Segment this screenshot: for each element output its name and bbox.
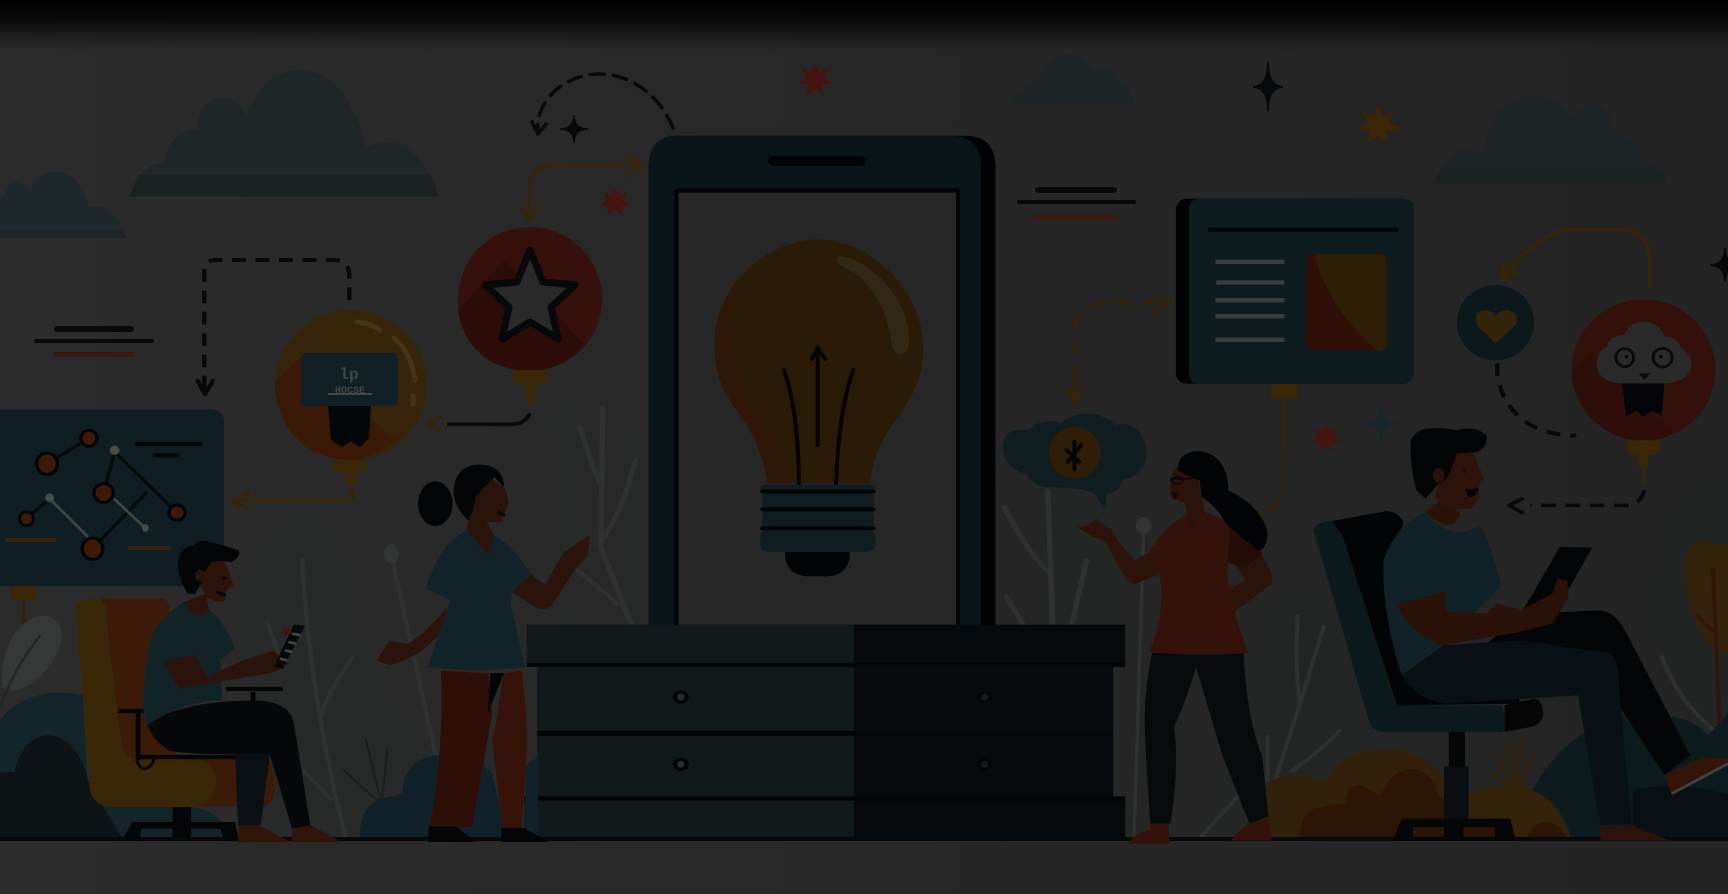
back hair and sleeve — [1196, 519, 1272, 617]
rear leg — [1483, 610, 1728, 795]
office chair — [1314, 511, 1543, 840]
medal bulb left: lp — [339, 366, 359, 384]
figure: standing woman left — [377, 464, 549, 842]
shirt — [1383, 512, 1501, 675]
cloud: large left — [130, 70, 439, 197]
sparkle stars and bursts — [560, 62, 1728, 451]
arm — [1077, 519, 1164, 584]
chair — [76, 599, 283, 840]
pants — [428, 670, 549, 842]
head — [1411, 428, 1487, 525]
top shadow — [0, 0, 1728, 50]
gold curved arrow to heart — [1501, 229, 1650, 287]
panel: screen card — [1176, 198, 1414, 447]
figure: seated man right — [1314, 428, 1728, 840]
woman left raised forearm — [512, 535, 590, 609]
torso and arm — [143, 541, 288, 725]
medal star — [458, 227, 602, 406]
text lines right — [1017, 187, 1136, 220]
figure: seated man left — [76, 541, 342, 842]
gold arrow to chart — [234, 490, 353, 509]
left mounds and leaf — [0, 615, 228, 837]
panel: network chart — [0, 409, 224, 624]
faint background plants left — [235, 510, 437, 837]
text lines left — [34, 326, 154, 357]
bushes behind left woman — [360, 755, 538, 837]
speech cloud — [1003, 414, 1147, 510]
cloud: small centre — [1012, 54, 1135, 104]
gold dashed arrow to screen panel — [1067, 295, 1170, 405]
floor line — [0, 837, 1728, 841]
front leg — [1402, 640, 1670, 840]
phone — [649, 136, 996, 633]
bulb screw base — [760, 485, 876, 576]
left arm — [377, 607, 446, 665]
shirt — [426, 530, 531, 670]
arm — [1396, 579, 1569, 645]
faint background plants centre — [548, 377, 1151, 837]
medal owl cloud — [1572, 299, 1716, 441]
heart badge — [1457, 285, 1534, 360]
dashed arrow to chart panel — [198, 260, 349, 394]
dashed arc arrow top — [532, 74, 673, 134]
head — [418, 464, 509, 555]
dashed curve from heart — [1497, 363, 1576, 436]
connector line — [1262, 447, 1284, 514]
light bulb — [714, 239, 923, 483]
tablet — [1521, 547, 1592, 614]
legs — [147, 700, 342, 842]
shirt — [1148, 512, 1248, 655]
connector and dashed arrow to man — [1509, 440, 1661, 513]
handheld phone — [274, 624, 305, 669]
dresser — [524, 625, 1125, 838]
cloud: large right — [1433, 96, 1667, 184]
faint background plants right — [1200, 480, 1728, 837]
arrow from star to medal — [427, 415, 529, 431]
bushes and tree right — [1266, 542, 1728, 837]
medal bulb left: HOCSE — [335, 386, 365, 397]
medal bulb left — [275, 310, 427, 486]
figure: standing woman right — [1077, 447, 1284, 844]
cloud: small left — [0, 172, 127, 238]
pants — [1128, 653, 1271, 844]
head — [1170, 451, 1268, 550]
gold arrow to phone and star — [521, 157, 642, 221]
